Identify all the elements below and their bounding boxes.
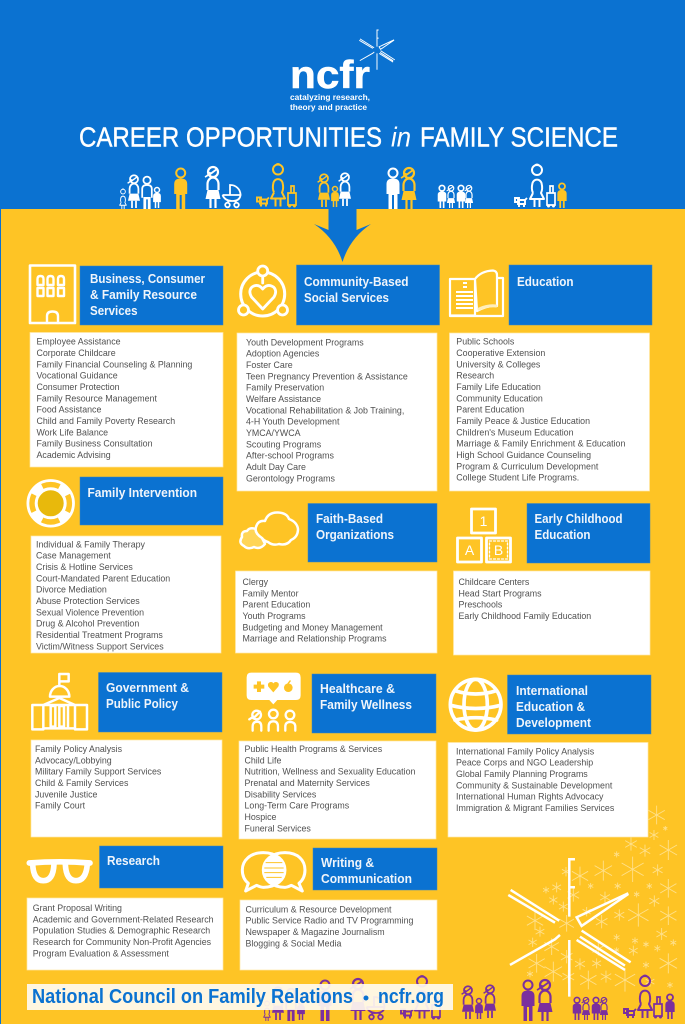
career list: Community & Sustainable Development: [456, 780, 613, 790]
career list: [27, 898, 223, 970]
career list: Teen Pregnancy Prevention & Assistance: [246, 371, 408, 381]
footer bar: National Council on Family Relations: [32, 986, 353, 1008]
header: Organizations: [316, 528, 394, 542]
icon: globe: [450, 679, 501, 730]
career list: Youth Development Programs: [246, 337, 364, 347]
career list: Drug & Alcohol Prevention: [36, 619, 139, 629]
career list: Global Family Planning Programs: [456, 769, 588, 779]
career list: Marriage and Relationship Programs: [242, 634, 387, 644]
career list: Juvenile Justice: [35, 789, 98, 799]
career list: Employee Assistance: [36, 337, 121, 347]
title: CAREER OPPORTUNITIES: [79, 122, 382, 152]
career list: Military Family Support Services: [35, 767, 162, 777]
career list: [454, 571, 650, 655]
career list: Population Studies & Demographic Research: [33, 926, 210, 936]
career list: Individual & Family Therapy: [36, 539, 146, 549]
career list: Blogging & Social Media: [246, 938, 341, 948]
career list: Child and Family Poverty Research: [36, 416, 175, 426]
panel: writing and communication: [240, 848, 437, 970]
career list: Work Life Balance: [36, 427, 108, 437]
career list: Family Peace & Justice Education: [456, 416, 590, 426]
icon: heart in circle: [238, 266, 288, 316]
career list: Newspaper & Magazine Journalism: [246, 927, 385, 937]
icon: life ring: [25, 478, 76, 529]
career list: Budgeting and Money Management: [242, 622, 383, 632]
header: [296, 265, 440, 325]
career list: Curriculum & Resource Development: [246, 904, 392, 914]
career list: Food Assistance: [36, 405, 101, 415]
title: in: [391, 122, 411, 152]
panel: education: [450, 265, 652, 491]
career list: 4-H Youth Development: [246, 417, 340, 427]
header: Community-Based: [304, 275, 408, 289]
header: [527, 504, 650, 563]
career list: [239, 741, 436, 839]
panel: family intervention: [25, 477, 223, 653]
header: [308, 504, 437, 562]
icon: alphabet blocks: A: [465, 542, 475, 558]
career list: Early Childhood Family Education: [458, 611, 591, 621]
career list: Victim/Witness Support Services: [36, 641, 164, 651]
panel: international education and development: [448, 675, 651, 837]
career list: Court-Mandated Parent Education: [36, 573, 170, 583]
logo: ncfr: ncfr: [290, 54, 370, 97]
career list: Community Education: [456, 393, 543, 403]
panel: healthcare and family wellness: [239, 673, 436, 839]
career list: Consumer Protection: [36, 382, 120, 392]
career list: Long-Term Care Programs: [244, 801, 350, 811]
career list: Funeral Services: [244, 823, 311, 833]
icon: glasses: [29, 862, 90, 881]
header: [312, 674, 436, 733]
career list: College Student Life Programs.: [456, 473, 579, 483]
career list: Prenatal and Maternity Services: [244, 778, 370, 788]
career list: Peace Corps and NGO Leadership: [456, 758, 593, 768]
header: Family Wellness: [320, 698, 412, 712]
career list: Academic Advising: [36, 450, 111, 460]
career list: Case Management: [36, 551, 111, 561]
career list: Vocational Guidance: [36, 371, 118, 381]
career list: Vocational Rehabilitation & Job Training,: [246, 405, 404, 415]
yellow main background: [1, 209, 685, 1024]
career list: Abuse Protection Services: [36, 596, 140, 606]
header: [80, 266, 223, 325]
career list: [31, 536, 221, 653]
icon: clouds: [240, 512, 298, 548]
career list: Adoption Agencies: [246, 349, 320, 359]
career list: Childcare Centers: [458, 577, 530, 587]
panel: business, consumer and family resource services: [30, 266, 223, 467]
career list: University & Colleges: [456, 359, 541, 369]
header: Development: [516, 716, 592, 730]
career list: Cooperative Extension: [456, 348, 545, 358]
career list: [448, 742, 648, 837]
icon: speech bubble with three people: [247, 673, 301, 731]
career list: Program Evaluation & Assessment: [33, 948, 169, 958]
header: Communication: [321, 872, 412, 886]
career list: International Human Rights Advocacy: [456, 792, 604, 802]
header: Government &: [106, 681, 189, 695]
panel: community-based social services: [237, 265, 440, 491]
career list: Nutrition, Wellness and Sexuality Education: [244, 767, 415, 777]
blue header background: [0, 0, 685, 209]
career list: Parent Education: [456, 405, 524, 415]
panel: early childhood education: [454, 504, 650, 655]
header: Early Childhood: [534, 512, 622, 526]
career list: Parent Education: [242, 600, 310, 610]
panel: government and public policy: [31, 672, 222, 837]
career list: Grant Proposal Writing: [33, 903, 122, 913]
career list: Family Resource Management: [36, 393, 157, 403]
arrow: [314, 209, 371, 262]
career list: Family Mentor: [242, 588, 299, 598]
header: Family Intervention: [88, 486, 197, 500]
header: Education &: [516, 700, 585, 714]
header: Social Services: [304, 291, 389, 305]
career list: Residential Treatment Programs: [36, 630, 163, 640]
career list: Research for Community Non-Profit Agencies: [33, 937, 212, 947]
large white logo star: [508, 859, 631, 997]
header: [509, 265, 652, 325]
header: International: [516, 684, 588, 698]
icon: alphabet blocks: [458, 509, 510, 562]
career list: [236, 571, 437, 653]
career list: Family Preservation: [246, 383, 324, 393]
header: Writing &: [321, 856, 374, 870]
header: & Family Resource: [90, 288, 197, 302]
career list: Advocacy/Lobbying: [35, 755, 112, 765]
career list: Foster Care: [246, 360, 293, 370]
career list: Head Start Programs: [458, 588, 542, 598]
header: [98, 672, 222, 732]
career list: Program & Curriculum Development: [456, 461, 599, 471]
career list: Public Health Programs & Services: [244, 744, 383, 754]
career list: High School Guidance Counseling: [456, 450, 591, 460]
icon: capitol building: [32, 674, 87, 729]
header: [313, 848, 437, 890]
header: [100, 846, 223, 888]
header: Public Policy: [106, 697, 178, 711]
career list: Family Financial Counseling & Planning: [36, 359, 192, 369]
career list: Welfare Assistance: [246, 394, 321, 404]
career list: Family Court: [35, 801, 86, 811]
career list: [30, 332, 223, 467]
career list: Child & Family Services: [35, 778, 129, 788]
header: Healthcare &: [320, 682, 395, 696]
logo: ncfr: [290, 30, 395, 112]
header: Services: [90, 304, 138, 318]
header: Faith-Based: [316, 512, 383, 526]
panel: research: [27, 846, 223, 970]
career list: Preschools: [458, 600, 503, 610]
title: FAMILY SCIENCE: [420, 122, 618, 152]
icon: alphabet blocks: 1: [480, 513, 488, 529]
icon: overlapping speech bubbles: [242, 853, 305, 891]
logo: ncfr: theory and practice: [290, 103, 368, 112]
career list: Divorce Mediation: [36, 585, 107, 595]
career list: Crisis & Hotline Services: [36, 562, 133, 572]
title: [79, 122, 618, 152]
career list: Hospice: [244, 812, 277, 822]
family figures: footer row: [264, 974, 674, 1021]
header: [508, 675, 651, 734]
career list: [237, 333, 437, 491]
career list: Immigration & Migrant Families Services: [456, 803, 615, 813]
career list: [240, 900, 437, 970]
logo: ncfr: catalyzing research,: [290, 93, 370, 102]
career list: Research: [456, 371, 494, 381]
career list: Family Life Education: [456, 382, 541, 392]
career list: Public Schools: [456, 337, 515, 347]
icon: alphabet blocks: B: [494, 542, 503, 558]
panel: faith-based organizations: [236, 504, 437, 653]
career list: Gerontology Programs: [246, 473, 336, 483]
career list: International Family Policy Analysis: [456, 746, 595, 756]
career list: Clergy: [242, 577, 269, 587]
career list: [450, 333, 650, 491]
career list: Children's Museum Education: [456, 427, 574, 437]
career list: YMCA/YWCA: [246, 428, 301, 438]
footer bar: [27, 984, 453, 1010]
icon: open book: [450, 270, 503, 316]
career list: Youth Programs: [242, 611, 306, 621]
career list: Family Business Consultation: [36, 439, 153, 449]
career list: Child Life: [244, 755, 281, 765]
career list: Public Service Radio and TV Programming: [246, 916, 414, 926]
career list: Scouting Programs: [246, 439, 322, 449]
family figures: header row: [120, 163, 566, 209]
career list: After-school Programs: [246, 451, 335, 461]
career list: Family Policy Analysis: [35, 744, 123, 754]
career list: [31, 740, 222, 837]
career list: Academic and Government-Related Research: [33, 914, 214, 924]
header: Education: [517, 275, 574, 289]
footer bar: ncfr.org: [378, 986, 444, 1008]
icon: building: [30, 266, 75, 323]
header: Research: [107, 854, 160, 868]
career list: Corporate Childcare: [36, 348, 116, 358]
career list: Adult Day Care: [246, 462, 306, 472]
career list: Sexual Violence Prevention: [36, 607, 144, 617]
career list: Disability Services: [244, 789, 317, 799]
career list: Marriage & Family Enrichment & Education: [456, 439, 625, 449]
header: Education: [534, 528, 590, 542]
header: Business, Consumer: [90, 272, 205, 286]
decoration: starburst pattern: [527, 806, 677, 992]
header: [80, 477, 223, 525]
